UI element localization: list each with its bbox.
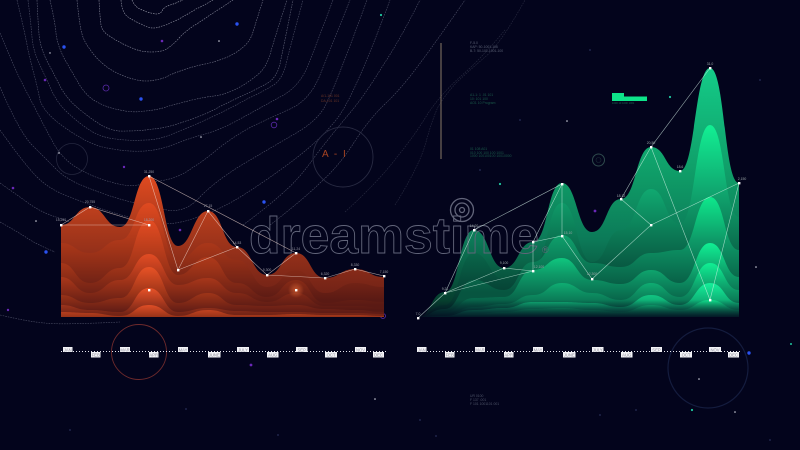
text block: grey readout bottom: UR 0100 <box>470 394 483 398</box>
chart: green layered area <box>417 68 740 319</box>
layer 5 <box>418 263 739 317</box>
green nodes <box>417 67 740 319</box>
text block: grey readout bottom: F 101 1001101 001 <box>470 402 499 406</box>
text block: green readout middle: 10: 101 100 <box>470 97 488 101</box>
green timeline <box>417 347 742 358</box>
layer 7 <box>418 300 739 317</box>
red month labels: JULY <box>238 347 248 352</box>
green month labels: MAR <box>475 347 485 352</box>
layer 3 <box>418 197 739 317</box>
topographic contour lines <box>0 0 525 324</box>
ring: outline circle around A-I label <box>313 127 373 187</box>
green month labels: NOV <box>710 347 720 352</box>
green node values: 14,20 <box>470 224 478 228</box>
ring: navy circle over timeline <box>668 328 748 408</box>
green month labels: OCT <box>682 352 691 358</box>
layer 6 <box>418 283 739 317</box>
text block: grey readout bottom: F 137 .001 <box>470 398 486 402</box>
green node values: 12,300 <box>587 272 597 276</box>
layer 1 <box>61 176 384 317</box>
red node values <box>56 170 388 276</box>
red month labels: OCT <box>327 352 336 358</box>
text block: small red readout: A/1-101 001 <box>321 94 340 98</box>
red month labels: JUNE <box>209 352 220 358</box>
text block: green readout lower: 01 108 A01 <box>470 147 487 151</box>
red month labels: APR <box>149 352 158 358</box>
green node values: 31,0 <box>707 62 713 66</box>
green node values: 18,12 <box>617 194 625 198</box>
red month labels: NOV <box>356 347 365 352</box>
green month labels: FEB <box>446 352 454 358</box>
text block: grey readout top: F-5.0 <box>470 41 478 45</box>
watermark registered mark: ® <box>542 245 549 255</box>
ring: small teal target <box>592 154 604 166</box>
red node values: 7,150 <box>380 270 388 274</box>
red node values: 9,300 <box>263 268 271 272</box>
text block: grey readout top: B-7: 50-101-1001-100 <box>470 49 503 53</box>
watermark swirl icon <box>450 198 474 222</box>
text block: green readout middle <box>470 93 496 105</box>
text block: small red readout <box>321 94 340 103</box>
layer 3 <box>61 220 384 317</box>
text block: grey readout bottom <box>470 394 499 406</box>
green node values: 20,50 <box>647 141 655 145</box>
layer 2 <box>61 203 384 317</box>
green node values: 7,0 <box>416 312 420 316</box>
green node values: 18,6 <box>677 165 683 169</box>
red month labels: SEP <box>298 347 306 352</box>
text block: green readout middle: A1-1: 1 .01 101 <box>470 93 493 97</box>
red timeline <box>61 347 386 358</box>
watermark text: dreamstime <box>249 207 539 264</box>
text block: small red readout: DA-101 101 <box>321 99 339 103</box>
red node values: 31,250 <box>144 170 154 174</box>
layer 7 <box>61 305 384 317</box>
text block: green readout lower: 010 100 100 100 1001 <box>470 151 504 155</box>
green month labels: APR <box>504 352 513 358</box>
green month labels: MAY <box>534 347 543 352</box>
text block: green readout lower <box>470 147 512 158</box>
divider: vertical rule <box>440 43 442 159</box>
red month labels: MAR <box>120 347 130 352</box>
layer 6 <box>61 288 384 317</box>
red nodes <box>60 175 385 291</box>
red month labels <box>63 347 384 358</box>
green node values <box>416 62 746 316</box>
legend: green bar <box>612 93 647 105</box>
legend: green bar: 1000 10 1000 1001 <box>612 101 635 105</box>
green month labels: AUG <box>622 352 631 358</box>
green node values: 2,150 <box>738 177 746 181</box>
green month labels: JULY <box>593 347 603 352</box>
red node values: 6,320 <box>321 272 329 276</box>
red node values: 8,330 <box>351 263 359 267</box>
red node values: 15,250 <box>56 218 66 222</box>
text block: grey readout top <box>470 41 503 53</box>
red month labels: AUG <box>268 352 277 358</box>
layer 4 <box>418 243 739 317</box>
red month labels: FEB <box>92 352 100 358</box>
green month labels: DEC <box>729 352 738 358</box>
red node values: 20,755 <box>85 200 95 204</box>
layer 5 <box>61 267 384 317</box>
green chart node network <box>416 62 746 319</box>
green month labels: JAN <box>418 347 426 352</box>
layer 2 <box>418 125 739 317</box>
red chart node network <box>56 170 388 298</box>
red node values: 11,24 <box>292 247 300 251</box>
text block: green readout lower: 1000 100100100 10010000 <box>470 154 512 158</box>
ring: red circle over timeline <box>112 324 166 380</box>
green node values: 15,10 <box>564 231 572 235</box>
red node values: 18,200 <box>144 218 154 222</box>
glow around lower node <box>288 282 304 298</box>
green node values: 12,100 <box>534 265 544 269</box>
label: A-I code: A - I <box>322 149 347 160</box>
green month labels <box>417 347 739 358</box>
chart: red layered area <box>61 176 384 317</box>
green node values: 9,100 <box>500 261 508 265</box>
red node values: 14,53 <box>233 241 241 245</box>
red node values: 27,15 <box>204 204 212 208</box>
red month labels: JAN <box>64 347 72 352</box>
red month labels: DEC <box>374 352 383 358</box>
ring: left outline circle <box>56 144 88 174</box>
text block: grey readout top: KAP: 50-1001-106 <box>470 45 498 49</box>
red month labels: MAY <box>179 347 188 352</box>
bottom fade <box>417 300 740 319</box>
text block: green readout middle: AO1 10 Program <box>470 101 496 105</box>
green month labels: JUNE <box>564 352 575 358</box>
layer 4 <box>61 254 384 317</box>
green node values: 9,21 <box>442 287 448 291</box>
green month labels: SEP <box>652 347 661 352</box>
layer 1 <box>418 68 739 317</box>
